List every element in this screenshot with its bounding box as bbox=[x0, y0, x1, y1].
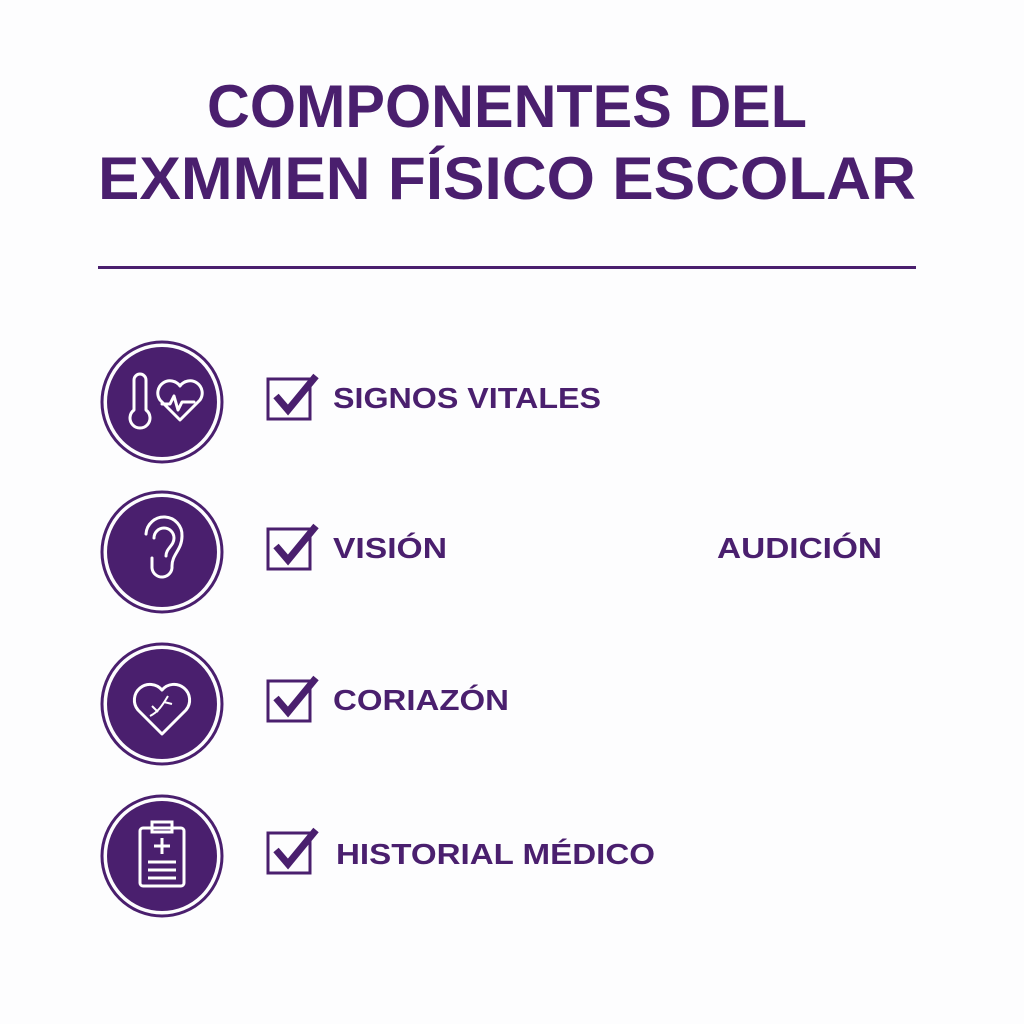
checkbox bbox=[268, 376, 316, 419]
icon: clipboard bbox=[102, 796, 222, 916]
row: vision / audicion bbox=[102, 492, 882, 612]
row: corazon bbox=[102, 644, 509, 764]
icon: ear bbox=[102, 492, 222, 612]
title: COMPONENTES DEL bbox=[207, 73, 807, 140]
label: VISIÓN bbox=[333, 531, 447, 565]
label: audicion: AUDICIÓN bbox=[717, 531, 882, 565]
title: EXMMEN FÍSICO ESCOLAR bbox=[98, 145, 916, 212]
label: SIGNOS VITALES bbox=[333, 383, 601, 415]
label: HISTORIAL MÉDICO bbox=[336, 837, 655, 871]
title bbox=[98, 73, 916, 212]
row: historial medico bbox=[102, 796, 655, 916]
checkbox bbox=[268, 830, 316, 873]
icon: heart bbox=[102, 644, 222, 764]
checkbox bbox=[268, 678, 316, 721]
row: signos vitales bbox=[102, 342, 601, 462]
label: CORIAZÓN bbox=[333, 683, 509, 717]
checkbox bbox=[268, 526, 316, 569]
icon: thermometer and heart bbox=[102, 342, 222, 462]
